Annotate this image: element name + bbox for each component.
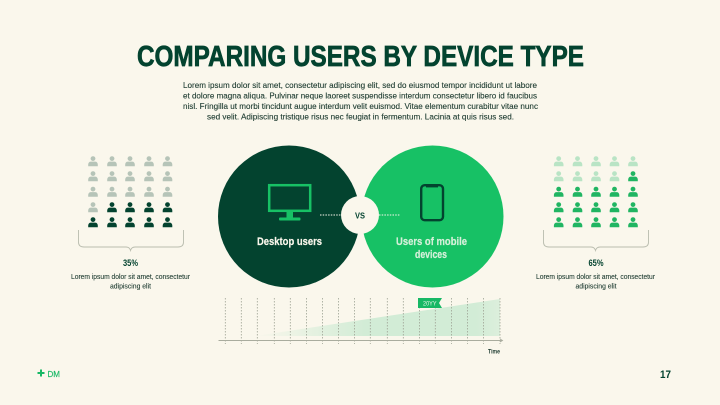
pictogram: 65 percent mobile people xyxy=(554,156,638,227)
bracket xyxy=(78,230,184,250)
panel: mobile users circle xyxy=(362,146,504,288)
panel: mobile share pictogram xyxy=(536,156,656,290)
caption: adipiscing elit xyxy=(576,282,616,290)
intro text block: et dolore magna aliqua. Pulvinar neque laoreet suspendisse interdum consectetur libero id faucibus xyxy=(183,90,537,100)
caption xyxy=(536,272,656,290)
panel: desktop share pictogram xyxy=(71,156,191,290)
icon: smartphone xyxy=(421,185,443,220)
label: users of mobile devices: devices xyxy=(415,249,447,261)
title: COMPARING USERS BY DEVICE TYPE xyxy=(137,41,584,73)
footer logo xyxy=(38,369,60,379)
year flag: 20YY xyxy=(423,302,436,308)
time axis xyxy=(218,339,502,342)
caption: adipiscing elit xyxy=(110,282,151,290)
year flag xyxy=(418,298,442,308)
axis label: time: Time xyxy=(488,350,501,356)
vs badge xyxy=(341,196,379,234)
caption xyxy=(71,272,191,290)
intro text block: sed velit. Adipiscing tristique risus nec feugiat in fermentum. Lacinia at quis risus sed. xyxy=(207,112,514,122)
label: users of mobile devices xyxy=(396,236,467,261)
icon: desktop monitor xyxy=(269,185,310,220)
caption: Lorem ipsum dolor sit amet, consectetur xyxy=(71,272,191,281)
icon: plus mark xyxy=(38,370,44,376)
label: desktop users: Desktop users xyxy=(257,236,322,248)
connector dotted lines xyxy=(320,214,400,216)
pictogram: 35 percent desktop people xyxy=(88,156,172,227)
footer logo: DM xyxy=(48,369,60,379)
percentage: 65%: 65% xyxy=(588,258,604,268)
area trend xyxy=(255,299,500,336)
percentage: 35%: 35% xyxy=(123,258,138,268)
timeline chart xyxy=(218,298,502,356)
intro text block: Lorem ipsum dolor sit amet, consectetur adipiscing elit, sed do eiusmod tempor incididunt ut labore xyxy=(183,80,537,90)
vs badge: VS xyxy=(355,210,365,220)
bracket xyxy=(544,230,648,250)
page number: 17 xyxy=(660,369,671,381)
caption: Lorem ipsum dolor sit amet, consectetur xyxy=(536,272,656,281)
panel: desktop users circle xyxy=(218,146,360,288)
intro text block xyxy=(183,80,539,122)
label: users of mobile devices: Users of mobile xyxy=(396,236,467,248)
intro text block: nisl. Fringilla ut morbi tincidunt augue interdum velit euismod. Vitae elementum curabitur vitae nunc xyxy=(183,101,539,111)
